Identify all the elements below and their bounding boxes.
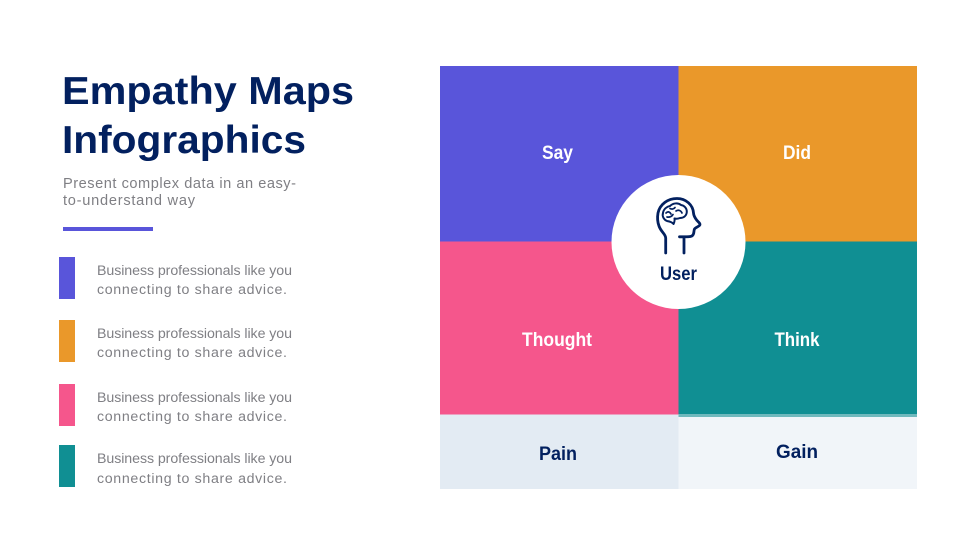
legend item: pink: connecting to share advice. — [97, 409, 287, 425]
subtitle: to-understand way — [63, 193, 196, 209]
center circle: user — [612, 175, 746, 309]
legend item: orange: connecting to share advice. — [97, 345, 287, 361]
legend item: pink: Business professionals like you — [97, 390, 292, 406]
title: Infographics — [62, 119, 306, 162]
legend item: teal: Business professionals like you — [97, 451, 292, 467]
panel: think — [678, 242, 917, 417]
user label: User — [660, 264, 698, 285]
legend item: pink — [59, 384, 292, 426]
panel: say: Say — [542, 143, 573, 164]
panel: thought — [440, 242, 678, 414]
legend item: orange — [59, 320, 292, 362]
panel: did — [678, 66, 917, 242]
panel: gain: Gain — [776, 442, 818, 463]
subtitle — [63, 176, 296, 209]
title: Empathy Maps — [62, 70, 354, 113]
legend list — [59, 257, 292, 487]
panel: say — [440, 66, 678, 242]
legend item: teal — [59, 445, 292, 487]
panel: did: Did — [783, 143, 811, 164]
legend item: purple: Business professionals like you — [97, 263, 292, 279]
legend item: purple: connecting to share advice. — [97, 282, 287, 298]
legend item: teal: connecting to share advice. — [97, 471, 287, 487]
icon: head with brain — [658, 198, 700, 253]
panel: pain — [440, 414, 678, 489]
panel: pain: Pain — [539, 444, 577, 465]
panel: gain — [678, 417, 917, 489]
accent rule — [63, 227, 153, 231]
legend item: orange: Business professionals like you — [97, 326, 292, 342]
title — [62, 70, 354, 162]
empathy map — [440, 66, 917, 489]
legend item: purple — [59, 257, 292, 299]
panel: thought: Thought — [522, 330, 593, 351]
panel: think: Think — [774, 330, 820, 351]
subtitle: Present complex data in an easy- — [63, 176, 296, 192]
